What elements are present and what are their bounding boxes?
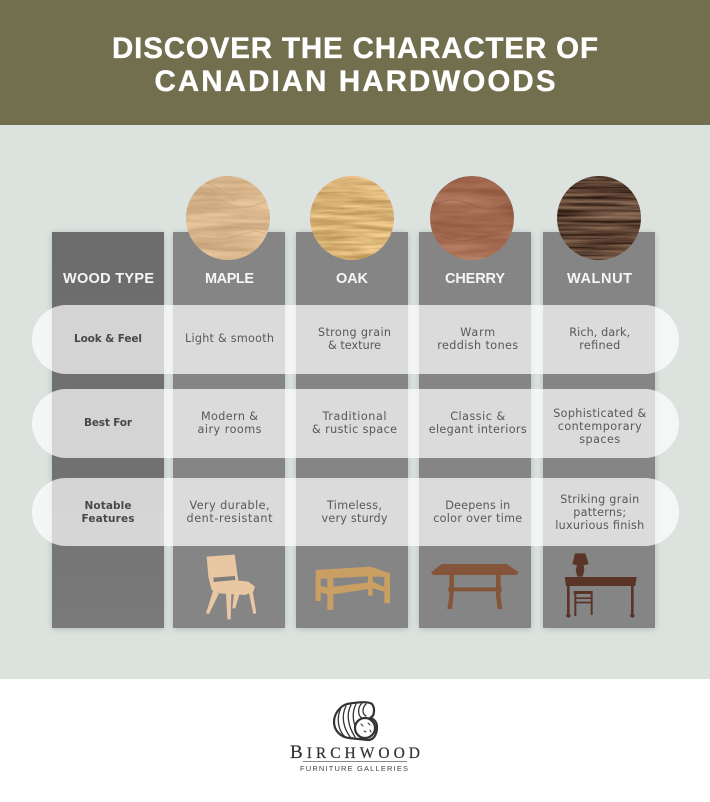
row values xyxy=(185,326,630,352)
swatch: walnut xyxy=(557,176,641,260)
row values: Warm xyxy=(460,326,495,339)
row values: luxurious finish xyxy=(555,519,644,532)
row values: contemporary xyxy=(558,420,642,433)
column headings: WOOD TYPE xyxy=(63,271,154,287)
swatch: cherry xyxy=(430,176,514,260)
row values xyxy=(198,407,646,446)
row values: Traditional xyxy=(322,410,386,423)
row values: Strong grain xyxy=(318,326,391,339)
row values: Deepens in xyxy=(445,499,510,512)
icon: log xyxy=(334,702,377,740)
tagline: FURNITURE GALLERIES xyxy=(300,764,408,773)
row values: refined xyxy=(579,339,620,352)
row values: Light & smooth xyxy=(185,332,274,345)
row label: Features xyxy=(82,513,134,525)
furniture icons xyxy=(206,553,637,619)
column headings: OAK xyxy=(336,271,369,287)
footer xyxy=(0,679,710,802)
band: notable features xyxy=(32,478,679,546)
title: DISCOVER THE CHARACTER OF xyxy=(112,32,598,65)
wordmark: B IRCHWOOD xyxy=(290,742,420,763)
band: look and feel xyxy=(32,305,679,374)
icon: chair xyxy=(206,555,256,619)
title xyxy=(112,32,598,98)
row values: spaces xyxy=(579,433,620,446)
table columns xyxy=(52,232,655,628)
title: CANADIAN HARDWOODS xyxy=(154,65,556,98)
row label: Look & Feel xyxy=(74,333,142,345)
icon: coffee table xyxy=(316,567,390,610)
band: best for xyxy=(32,389,679,458)
logo: birchwood xyxy=(290,702,420,773)
row values: Classic & xyxy=(450,410,505,423)
row values: Modern & xyxy=(201,410,258,423)
row values: elegant interiors xyxy=(429,423,527,436)
row label xyxy=(82,500,134,525)
header banner xyxy=(0,0,710,125)
row values: & rustic space xyxy=(312,423,397,436)
row values: airy rooms xyxy=(198,423,262,436)
page background xyxy=(0,125,710,679)
column headings xyxy=(63,271,632,287)
column headings: WALNUT xyxy=(567,271,632,287)
row values: Timeless, xyxy=(326,499,382,512)
row values: reddish tones xyxy=(437,339,518,352)
row values: very sturdy xyxy=(322,512,388,525)
swatch: oak xyxy=(310,176,394,260)
row values: Very durable, xyxy=(190,499,270,512)
column headings: CHERRY xyxy=(445,271,505,287)
icon: dining table xyxy=(431,564,519,609)
row values: Sophisticated & xyxy=(553,407,646,420)
row values: dent-resistant xyxy=(186,512,273,525)
row values xyxy=(186,493,644,532)
swatch: maple xyxy=(186,176,270,260)
row values: & texture xyxy=(328,339,381,352)
row values: color over time xyxy=(433,512,522,525)
row values: Striking grain xyxy=(560,493,639,506)
row label: Notable xyxy=(84,500,132,512)
row label: Best For xyxy=(84,417,133,429)
icon: writing desk with lamp and stool xyxy=(565,553,637,618)
row values: patterns; xyxy=(573,506,626,519)
row values: Rich, dark, xyxy=(569,326,630,339)
wood swatches xyxy=(186,176,641,260)
column headings: MAPLE xyxy=(205,271,254,287)
